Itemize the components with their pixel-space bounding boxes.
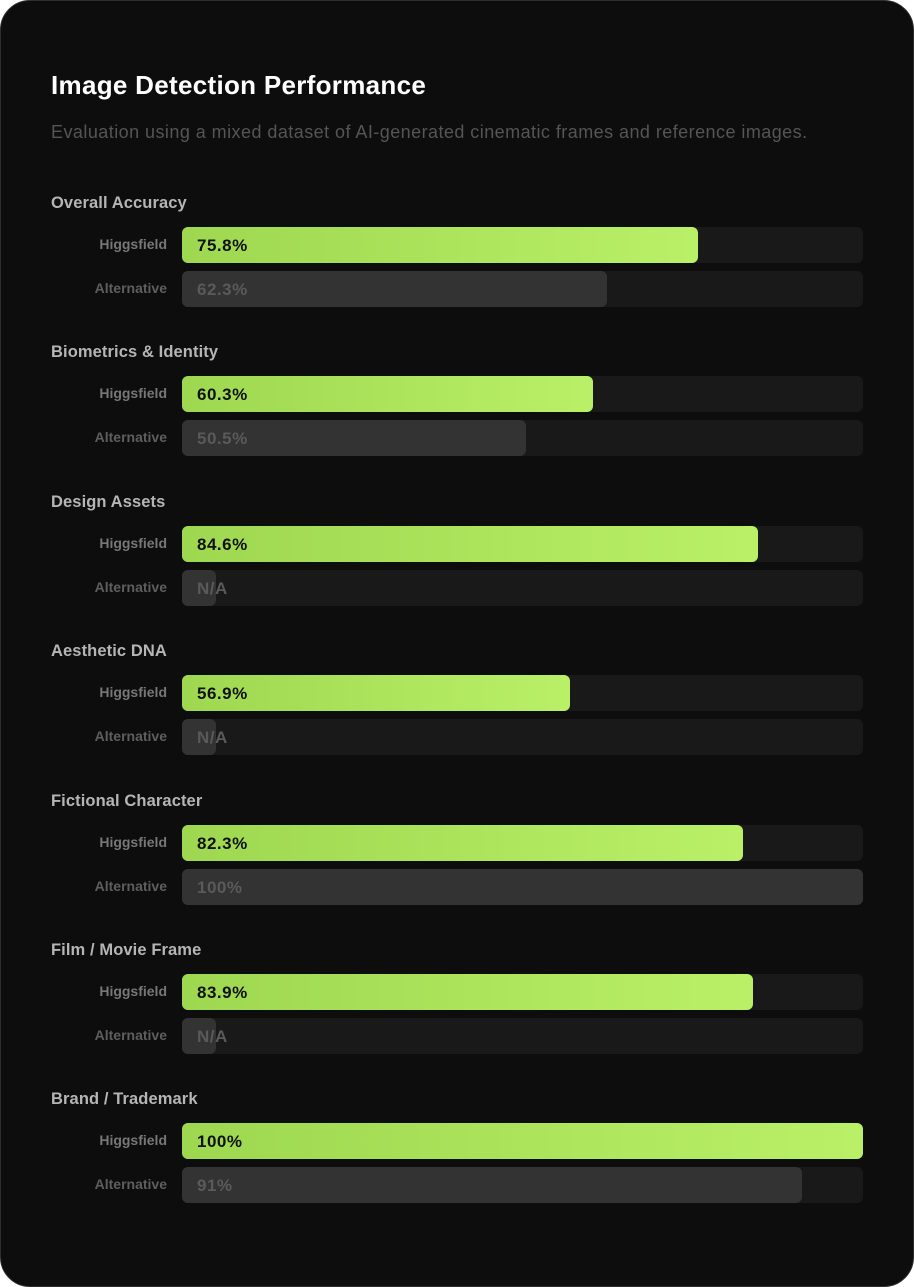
group: Overall Accuracy: [51, 194, 863, 307]
bar: Higgsfield 60.3: 60.3%: [197, 385, 248, 404]
bar: Higgsfield 60.3: [99, 376, 863, 412]
bar: Alternative 91: 91%: [197, 1176, 233, 1195]
bar: Alternative N/A: Alternative: [95, 728, 167, 744]
bar: Alternative N/A: Alternative: [95, 579, 167, 595]
bar: Higgsfield 100: Higgsfield: [99, 1132, 167, 1148]
bar: Alternative N/A: [95, 719, 863, 755]
bar: Alternative N/A: N/A: [197, 728, 228, 747]
group: Aesthetic DNA: [51, 642, 863, 755]
bar: Higgsfield 83.9: Higgsfield: [99, 983, 167, 999]
bar: Higgsfield 100: [99, 1123, 863, 1159]
group: Design Assets: [51, 493, 863, 606]
bar: Alternative 100: Alternative: [95, 878, 167, 894]
group: Biometrics & Identity: Biometrics & Identity: [51, 343, 218, 361]
group: Aesthetic DNA: Aesthetic DNA: [51, 642, 167, 660]
bar: Higgsfield 56.9: Higgsfield: [99, 684, 167, 700]
subtitle: Evaluation using a mixed dataset of AI-generated cinematic frames and reference images.: [51, 122, 808, 142]
bar: Alternative N/A: N/A: [197, 579, 228, 598]
group: Design Assets: Design Assets: [51, 493, 165, 511]
bar: Alternative 91: Alternative: [95, 1176, 167, 1192]
bar: Alternative 62.3: Alternative: [95, 280, 167, 296]
title: Image Detection Performance: [51, 70, 426, 100]
group: Brand / Trademark: Brand / Trademark: [51, 1090, 198, 1108]
bar: Higgsfield 75.8: Higgsfield: [99, 236, 167, 252]
group: Biometrics & Identity: [51, 343, 863, 456]
bar: Higgsfield 84.6: 84.6%: [197, 535, 248, 554]
group: Overall Accuracy: Overall Accuracy: [51, 194, 187, 212]
bar: Alternative 100: 100%: [197, 878, 242, 897]
bar: Higgsfield 84.6: Higgsfield: [99, 535, 167, 551]
bar: Alternative 62.3: 62.3%: [197, 280, 248, 299]
bar: Alternative 91: [95, 1167, 863, 1203]
bar: Alternative 62.3: [95, 271, 863, 307]
bar: Higgsfield 83.9: [99, 974, 863, 1010]
bar: Higgsfield 75.8: 75.8%: [197, 236, 248, 255]
bar: Alternative 50.5: Alternative: [95, 429, 167, 445]
bar: Higgsfield 56.9: 56.9%: [197, 684, 248, 703]
bar: Alternative N/A: N/A: [197, 1027, 228, 1046]
bar: Higgsfield 84.6: [99, 526, 863, 562]
bar: Higgsfield 82.3: [99, 825, 863, 861]
bar: Alternative 100: [95, 869, 863, 905]
bar: Alternative 50.5: [95, 420, 863, 456]
bar: Higgsfield 82.3: 82.3%: [197, 834, 248, 853]
group: Fictional Character: Fictional Character: [51, 792, 202, 810]
group: Film / Movie Frame: Film / Movie Frame: [51, 941, 201, 959]
bar: Higgsfield 56.9: [99, 675, 863, 711]
bar: Alternative N/A: Alternative: [95, 1027, 167, 1043]
bar: Higgsfield 82.3: Higgsfield: [99, 834, 167, 850]
group: Brand / Trademark: [51, 1090, 863, 1203]
bar: Alternative N/A: [95, 1018, 863, 1054]
group: Film / Movie Frame: [51, 941, 863, 1054]
group: Fictional Character: [51, 792, 863, 905]
bar: Higgsfield 60.3: Higgsfield: [99, 385, 167, 401]
bar: Higgsfield 100: 100%: [197, 1132, 242, 1151]
bar: Alternative 50.5: 50.5%: [197, 429, 248, 448]
bar: Alternative N/A: [95, 570, 863, 606]
bar: Higgsfield 75.8: [99, 227, 863, 263]
bar: Higgsfield 83.9: 83.9%: [197, 983, 248, 1002]
